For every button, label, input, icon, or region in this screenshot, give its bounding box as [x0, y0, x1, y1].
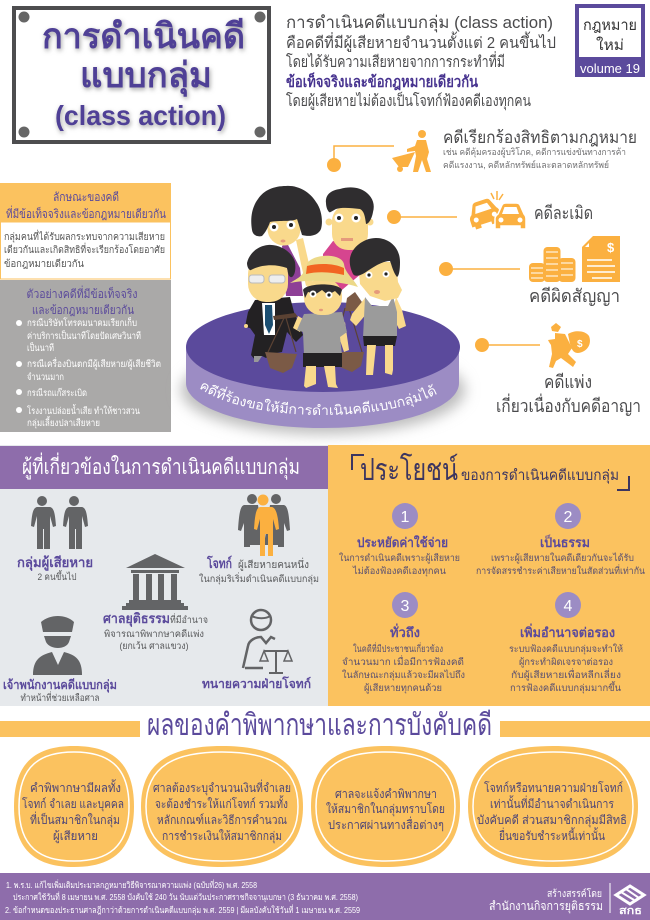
panel: case examples: กลุ่มเลี้ยงปลาเสียหาย: [27, 416, 100, 429]
card: who may enforce: โจทก์หรือทนายความฝ่ายโจทก์: [484, 781, 623, 795]
panel: case examples: และข้อกฎหมายเดียวกัน: [32, 303, 134, 317]
intro text: ข้อเท็จจริงและข้อกฎหมายเดียวกัน: [286, 71, 478, 91]
icon: crashed cars: [465, 191, 526, 230]
card: notification of judgment: ให้สมาชิกในกลุ่มทราบโดย: [326, 802, 445, 817]
intro text: การดำเนินคดีแบบกลุ่ม (class action): [286, 13, 553, 33]
icon: thief with money bag: [548, 323, 590, 368]
card: amount to be paid: [141, 746, 303, 867]
benefit 2: เป็นธรรม: [540, 533, 590, 550]
credit: สำนักงานกิจการยุติธรรม: [489, 899, 603, 914]
case type: civil linked to criminal: [475, 323, 641, 416]
card: judgment binds all: ที่เป็นสมาชิกในกลุ่ม: [30, 811, 120, 828]
card: notification of judgment: ประกาศผ่านทางสื่อต่างๆ: [328, 816, 444, 832]
benefit 3: 3: [401, 598, 410, 615]
panel: case examples: โรงงานปล่อยน้ำเสีย ทำให้ชาวสวน: [27, 404, 140, 417]
benefit 1: ในการดำเนินคดีเพราะผู้เสียหาย: [339, 552, 460, 564]
icon: court officer: [33, 616, 82, 675]
panel: case examples: กรณีบริษัทโทรคมนาคมเรียกเก็บ: [27, 316, 137, 329]
benefit 4: [509, 592, 623, 694]
benefit 4: ผู้กระทำผิดเจรจาต่อรอง: [519, 657, 613, 668]
panel: characteristics: เดียวกันและเกิดสิทธิที่จะเรียกร้องโดยอาศัย: [4, 242, 165, 256]
card: who may enforce: บังคับคดี ส่วนสมาชิกกลุ่มมีสิทธิ: [477, 813, 627, 828]
heading: benefits: ของการดำเนินคดีแบบกลุ่ม: [461, 467, 619, 484]
panel: parties involved: ทนายความฝ่ายโจทก์: [202, 676, 311, 691]
case type: contract: [439, 236, 620, 306]
platform: [174, 302, 472, 442]
logo: [616, 886, 644, 917]
panel: parties involved: ในกลุ่มริเริ่มดำเนินคดีแบบกลุ่ม: [199, 572, 319, 585]
icon: thief with money bag: $: [577, 339, 583, 350]
card: judgment binds all: [14, 746, 134, 867]
title panel: [14, 8, 269, 142]
benefit 1: 1: [401, 509, 410, 526]
benefit 1: ประหยัดค่าใช้จ่าย: [357, 534, 448, 550]
credit: [489, 883, 610, 914]
benefit 4: กับผู้เสียหายเพื่อหลีกเลี่ยง: [511, 668, 621, 681]
icon: wheelbarrow worker: [392, 130, 431, 172]
card: amount to be paid: หลักเกณฑ์และวิธีการคำนวณ: [157, 813, 287, 827]
panel: case examples: เป็นนาที: [27, 341, 54, 354]
panel: characteristics: กลุ่มคนที่ได้รับผลกระทบจากความเสียหาย: [4, 229, 165, 243]
case type: rights claim: คดีเรียกร้องสิทธิตามกฎหมาย: [443, 128, 637, 147]
benefit 3: [342, 592, 465, 694]
man with curly hair: [322, 187, 374, 300]
boy with straw hat: [290, 256, 358, 388]
yoke and baskets: [265, 292, 364, 373]
benefit 2: 2: [564, 509, 573, 526]
panel: parties involved: โจทก์: [206, 554, 232, 571]
platform caption: คดีที่ร้องขอให้มีการดำเนินคดีแบบกลุ่มได้: [200, 383, 437, 415]
icon: plaintiff among group: [238, 494, 290, 556]
panel: characteristics: [0, 183, 171, 279]
case type: civil linked to criminal: คดีแพ่ง: [544, 372, 592, 392]
card: amount to be paid: การชำระเงินให้สมาชิกกลุ่ม: [162, 829, 282, 844]
credit: สร้างสรรค์โดย: [547, 887, 602, 900]
intro text: [286, 13, 556, 111]
card: who may enforce: [468, 746, 638, 867]
card: judgment binds all: โจทก์ จำเลย และบุคคล: [22, 797, 124, 812]
panel: characteristics: ที่มีข้อเท็จจริงและข้อกฎหมายเดียวกัน: [6, 205, 166, 221]
panel: case examples: [0, 280, 171, 432]
woman: [251, 186, 322, 296]
card: notification of judgment: [311, 746, 460, 867]
card: judgment binds all: ผู้เสียหาย: [53, 829, 98, 844]
heading: benefits: ประโยชน์: [360, 452, 458, 487]
footer: [0, 873, 650, 920]
panel: case examples: กรณีเครื่องบินตกมีผู้เสียหาย/ผู้เสียชีวิต: [27, 357, 161, 370]
intro text: โดยได้รับความเสียหายจากการกระทำที่มี: [286, 51, 505, 71]
benefit 3: ผู้เสียหายทุกคนด้วย: [364, 682, 442, 694]
benefit 4: ระบบฟ้องคดีแบบกลุ่มจะทำให้: [509, 643, 623, 655]
illustration: group of people: [244, 186, 406, 388]
footnotes: ประกาศใช้วันที่ 8 เมษายน พ.ศ. 2558 บังคับใช้ 240 วัน นับแต่วันประกาศราชกิจจานุเบกษา (3 ธันวาคม พ.ศ. 2558): [13, 891, 358, 903]
benefit 1: ไม่ต้องฟ้องคดีเองทุกคน: [352, 565, 446, 577]
heading: judgment and enforcement: ผลของคำพิพากษาและการบังคับคดี: [147, 709, 492, 742]
logo: สกธ: [619, 906, 642, 917]
panel: parties involved: ศาลยุติธรรม: [103, 611, 170, 627]
benefit 1: [339, 503, 460, 577]
benefit 3: ในคดีที่มีประชาชนเกี่ยวข้อง: [353, 642, 443, 655]
footnotes: [5, 879, 360, 916]
man in suit: [244, 245, 303, 362]
heading: parties involved: [0, 446, 328, 489]
boy in tank top: [350, 238, 406, 375]
panel: parties involved: ผู้เสียหายคนหนึ่ง: [238, 557, 309, 571]
card: notification of judgment: ศาลจะแจ้งคำพิพากษา: [335, 787, 437, 801]
panel: characteristics: ข้อกฎหมายเดียวกัน: [4, 258, 84, 270]
panel: case examples: กรณีรถแก๊สระเบิด: [27, 387, 87, 399]
case type: tort: [387, 191, 593, 230]
card: amount to be paid: จะต้องชำระให้แก่โจทก์ รวมทั้ง: [155, 795, 288, 811]
intro text: โดยผู้เสียหายไม่ต้องเป็นโจทก์ฟ้องคดีเองทุกคน: [286, 91, 531, 111]
case type: contract: คดีผิดสัญญา: [529, 286, 620, 306]
panel: parties involved: พิจารณาพิพากษาคดีแพ่ง: [104, 628, 204, 640]
benefit 4: 4: [564, 598, 573, 615]
heading: parties involved: ผู้ที่เกี่ยวข้องในการดำเนินคดีแบบกลุ่ม: [22, 452, 300, 480]
icon: coins and document: $: [607, 240, 615, 255]
footnotes: 2. ข้อกำหนดของประธานศาลฎีกาว่าด้วยการดำเนินคดีแบบกลุ่ม พ.ศ. 2559 | มีผลบังคับใช้วันที่ 1 เมษายน พ.ศ. 2559: [5, 904, 360, 916]
icon: court building: [122, 554, 188, 610]
panel: parties involved: [0, 445, 328, 706]
panel: parties involved: (ยกเว้น ศาลแขวง): [120, 641, 188, 652]
case type: tort: คดีละเมิด: [534, 203, 593, 223]
benefit 2: เพราะผู้เสียหายในคดีเดียวกันจะได้รับ: [491, 552, 634, 564]
heading: judgment and enforcement: [0, 709, 650, 742]
benefit 2: [476, 503, 645, 577]
title panel: แบบกลุ่ม: [80, 56, 212, 97]
card: amount to be paid: ศาลต้องระบุจำนวนเงินที่จำเลย: [153, 779, 291, 796]
series badge: volume 19: [580, 61, 640, 76]
panel: parties involved: ทำหน้าที่ช่วยเหลือศาล: [20, 691, 100, 704]
heading: benefits: [352, 452, 629, 490]
footnotes: 1. พ.ร.บ. แก้ไขเพิ่มเติมประมวลกฎหมายวิธีพิจารณาความแพ่ง (ฉบับที่26) พ.ศ. 2558: [6, 879, 257, 890]
icon: coins and document: [529, 236, 620, 282]
card: judgment binds all: คำพิพากษามีผลทั้ง: [30, 779, 121, 795]
panel: case examples: จำนวนมาก: [27, 372, 64, 383]
title panel: การดำเนินคดี: [42, 17, 245, 56]
benefit 3: ทั่วถึง: [390, 623, 420, 640]
panel: case examples: ตัวอย่างคดีที่มีข้อเท็จจริง: [26, 285, 138, 301]
panel: parties involved: กลุ่มผู้เสียหาย: [17, 555, 93, 571]
card: who may enforce: เท่านั้นที่มีอำนาจดำเนินการ: [490, 795, 614, 811]
title panel: (class action): [55, 100, 226, 131]
benefit 4: เพิ่มอำนาจต่อรอง: [520, 623, 615, 640]
panel: parties involved: เจ้าพนักงานคดีแบบกลุ่ม: [3, 678, 117, 693]
card: who may enforce: ยื่นขอรับชำระหนี้เท่านั้น: [499, 827, 605, 843]
case type: rights claim: คดีแรงงาน, คดีหลักทรัพย์และตลาดหลักทรัพย์: [443, 159, 609, 170]
series badge: กฎหมาย: [583, 17, 637, 34]
benefit 4: การฟ้องคดีแบบกลุ่มมากขึ้น: [510, 681, 622, 694]
benefit 3: จำนวนมาก เมื่อมีการฟ้องคดี: [342, 655, 464, 668]
series badge: ใหม่: [596, 36, 624, 54]
series badge: [575, 4, 645, 77]
case type: rights claim: [327, 128, 637, 172]
case type: rights claim: เช่น คดีคุ้มครองผู้บริโภค, คดีการแข่งขันทางการค้า: [443, 147, 626, 158]
panel: parties involved: ที่มีอำนาจ: [170, 613, 208, 626]
benefit 3: ในลักษณะกลุ่มแล้วจะมีผลไปถึง: [342, 669, 465, 681]
panel: characteristics: ลักษณะของคดี: [53, 190, 119, 204]
icon: two injured people: [31, 496, 88, 549]
panel: case examples: ค่าบริการเป็นนาทีโดยปัดเศษวินาที: [27, 329, 141, 342]
panel: benefits: [328, 445, 650, 706]
icon: lawyer with scales: [243, 610, 292, 673]
intro text: คือคดีที่มีผู้เสียหายจำนวนตั้งแต่ 2 คนขึ้นไป: [286, 31, 556, 53]
panel: parties involved: 2 คนขึ้นไป: [38, 570, 76, 583]
